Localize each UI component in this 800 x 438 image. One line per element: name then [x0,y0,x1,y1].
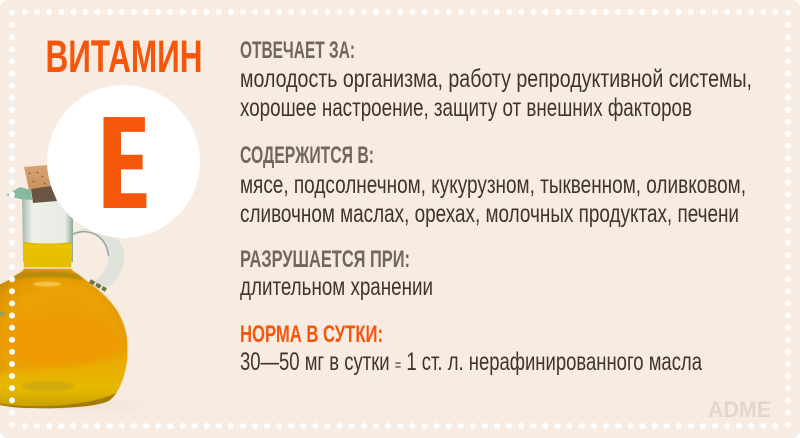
leaf [0,312,7,316]
badge: white circle with letter E [47,85,200,238]
title: ВИТАМИН [46,31,202,82]
text block: 30—50 мг в сутки = 1 ст. л. нерафинированного масла [240,348,702,376]
oil in neck [23,242,72,272]
section: responsible for [240,37,752,122]
section: daily norm [240,321,702,376]
text block [240,171,746,228]
heading: НОРМА В СУТКИ: [240,321,383,348]
jug neck glass [22,198,73,262]
jug handle [73,228,124,290]
heading: РАЗРУШАЕТСЯ ПРИ: [240,246,410,273]
heading: ОТВЕЧАЕТ ЗА: [240,37,355,64]
text block: длительном хранении [240,273,433,301]
section: contained in [240,142,746,228]
section: destroyed by [240,246,433,301]
jug body with oil [0,268,128,408]
illustration: oil jug [0,165,140,411]
heading: СОДЕРЖИТСЯ В: [240,142,374,169]
watermark: ADME: ADME [708,397,771,422]
shadow under jug [50,401,140,411]
letter E [98,89,149,236]
handle joint [90,281,106,290]
text block [240,65,752,122]
glass lip [6,187,32,200]
oil layers [0,271,130,411]
cork [24,165,57,203]
letter E: E [98,89,149,236]
